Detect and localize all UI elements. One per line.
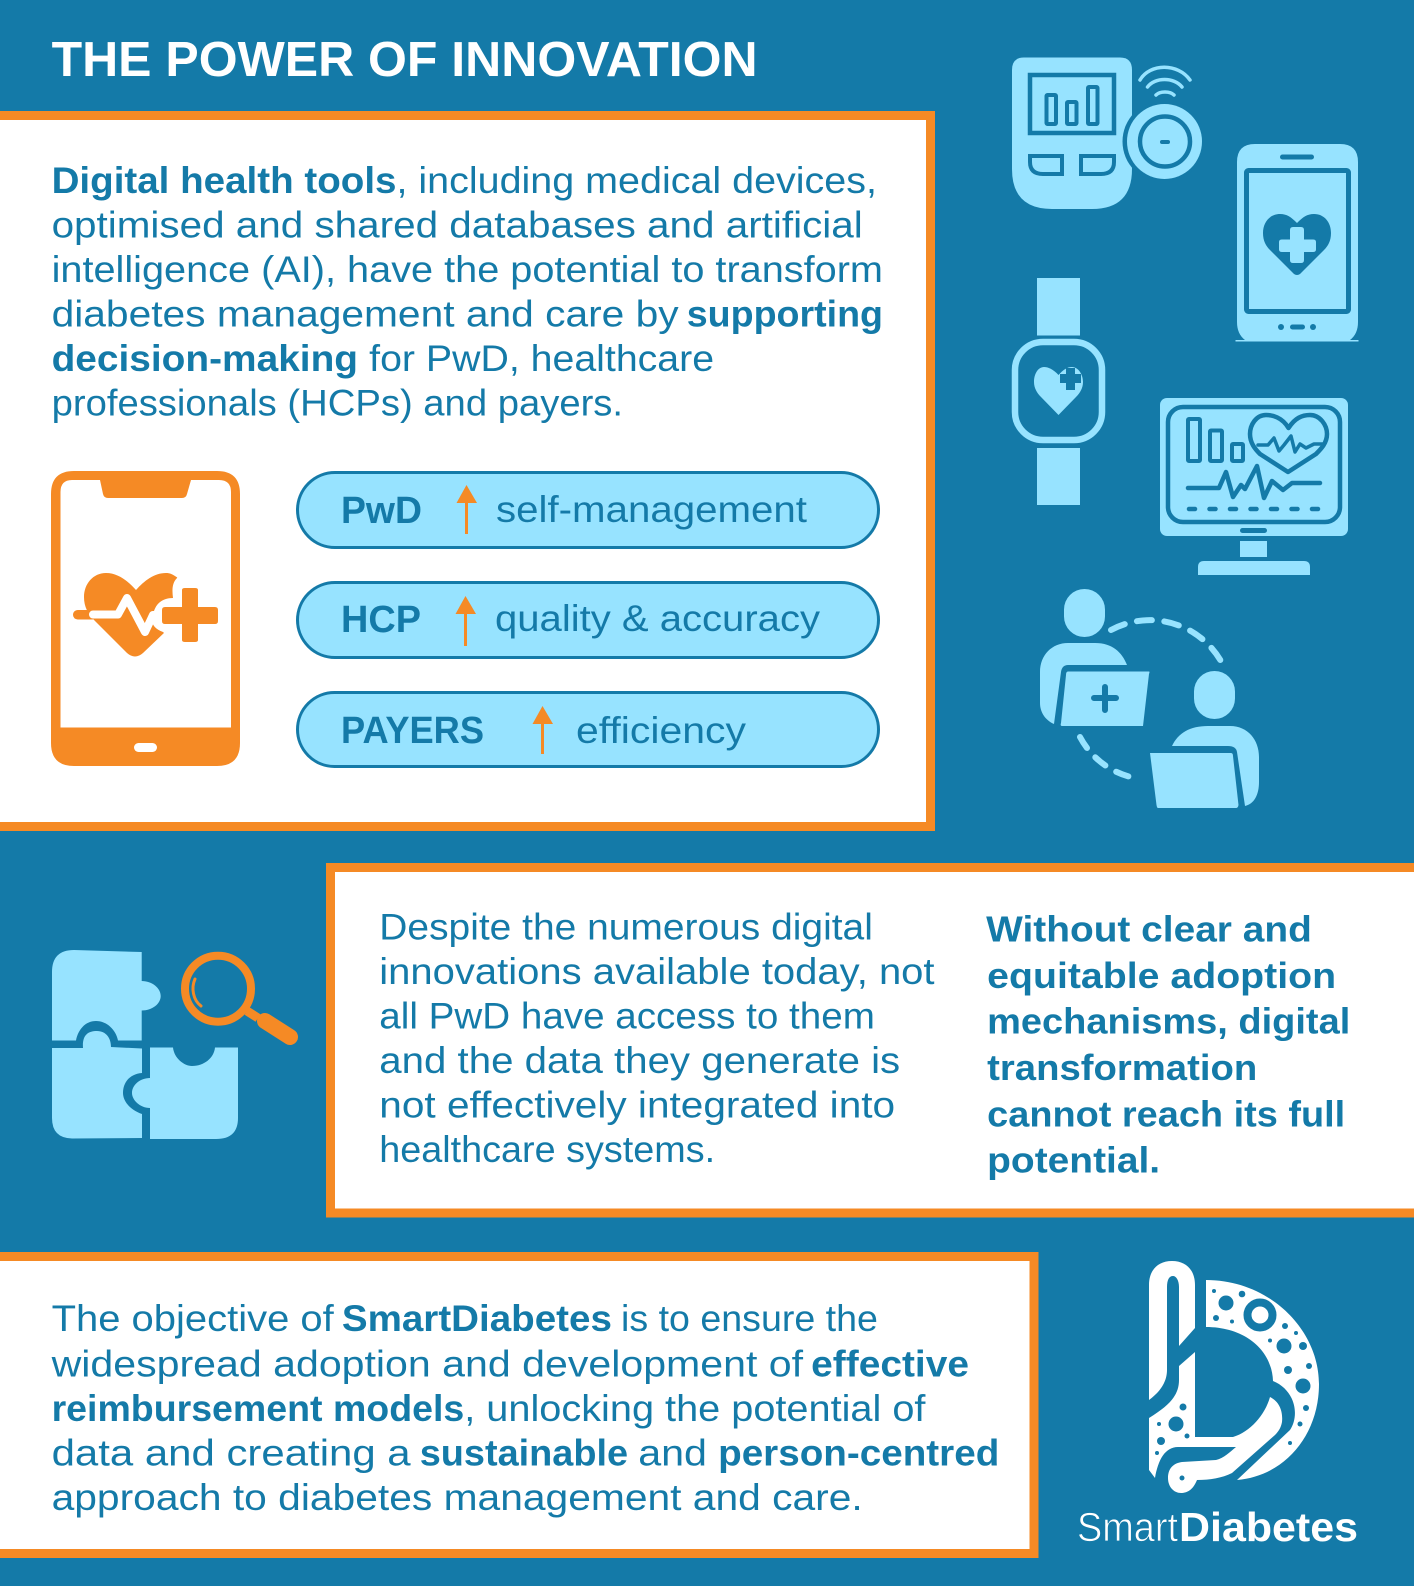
icon: monitor with heart chart <box>1160 398 1348 575</box>
paragraph: objective: person-centred <box>718 1432 999 1474</box>
pill: PwD self-management: self-management <box>496 489 808 530</box>
paragraph: objective: and <box>638 1432 707 1474</box>
pill: HCP quality and accuracy: HCP <box>341 599 421 641</box>
paragraph: objective: widespread adoption and development of <box>50 1343 804 1385</box>
logo wordmark: Smart <box>1077 1504 1179 1550</box>
intro paragraph <box>52 159 883 424</box>
callout: adoption mechanisms: transformation <box>987 1047 1257 1088</box>
title: THE POWER OF INNOVATION <box>52 31 758 87</box>
intro paragraph: , including medical devices, <box>396 159 877 201</box>
paragraph: objective: SmartDiabetes <box>342 1297 612 1339</box>
pill: HCP quality and accuracy: quality & accuracy <box>495 598 821 639</box>
intro paragraph: optimised and shared databases and artificial <box>52 204 863 246</box>
paragraph: objective: sustainable <box>420 1432 628 1474</box>
icon: smartphone with heart <box>1236 144 1358 342</box>
intro paragraph: professionals (HCPs) and payers. <box>52 382 623 424</box>
logo mark <box>1149 1261 1319 1493</box>
callout: adoption mechanisms: mechanisms, digital <box>987 1001 1350 1042</box>
paragraph: access to innovations: not effectively integrated into <box>379 1084 895 1126</box>
callout: adoption mechanisms: potential. <box>987 1139 1160 1180</box>
callout: adoption mechanisms: cannot reach its full <box>987 1094 1345 1135</box>
intro paragraph: diabetes management and care by <box>52 293 679 335</box>
paragraph: access to innovations: all PwD have access to them <box>379 995 875 1037</box>
pill: payers efficiency: PAYERS <box>341 710 484 752</box>
paragraph: access to innovations: innovations available today, not <box>379 950 935 992</box>
panel: digital health tools <box>0 116 930 826</box>
paragraph: objective: approach to diabetes management and care. <box>52 1476 863 1518</box>
panel: SmartDiabetes objective <box>0 1256 1034 1554</box>
intro paragraph: for PwD, healthcare <box>369 337 714 379</box>
paragraph: access to innovations <box>379 906 935 1170</box>
paragraph: objective: is to ensure the <box>621 1297 878 1339</box>
icon: two people on laptops connected <box>1040 589 1259 808</box>
paragraph: access to innovations: healthcare systems. <box>379 1128 715 1170</box>
icon: glucose meter with sensor <box>1012 58 1204 209</box>
paragraph: objective: reimbursement models <box>52 1387 464 1429</box>
icon: smartwatch <box>1015 278 1102 505</box>
callout: adoption mechanisms <box>986 909 1350 1180</box>
icon: magnifying glass <box>185 956 290 1037</box>
callout: adoption mechanisms: equitable adoption <box>987 955 1336 996</box>
logo wordmark <box>1077 1504 1358 1550</box>
paragraph: access to innovations: and the data they generate is <box>379 1039 900 1081</box>
logo: SmartDiabetes <box>1077 1261 1358 1550</box>
intro paragraph: Digital health tools <box>52 159 396 201</box>
pill: payers efficiency: efficiency <box>576 710 747 751</box>
logo wordmark: Diabetes <box>1179 1504 1358 1550</box>
intro paragraph: decision-making <box>52 337 358 379</box>
pill: HCP quality and accuracy <box>298 582 878 658</box>
paragraph: objective: data and creating a <box>52 1432 411 1474</box>
intro paragraph: intelligence (AI), have the potential to transform <box>52 248 883 290</box>
pill: payers efficiency <box>298 692 878 766</box>
paragraph: objective <box>50 1297 999 1518</box>
intro paragraph: supporting <box>687 293 883 335</box>
panel: access gap <box>330 868 1414 1213</box>
pill: PwD self-management: PwD <box>341 490 422 532</box>
icon: orange smartphone with heart <box>51 471 240 766</box>
pill: PwD self-management <box>298 472 878 548</box>
callout: adoption mechanisms: Without clear and <box>986 909 1312 950</box>
paragraph: objective: The objective of <box>52 1297 334 1339</box>
icon: puzzle pieces <box>52 950 238 1139</box>
paragraph: objective: , unlocking the potential of <box>464 1387 926 1429</box>
paragraph: access to innovations: Despite the numerous digital <box>379 906 873 948</box>
paragraph: objective: effective <box>811 1343 969 1385</box>
